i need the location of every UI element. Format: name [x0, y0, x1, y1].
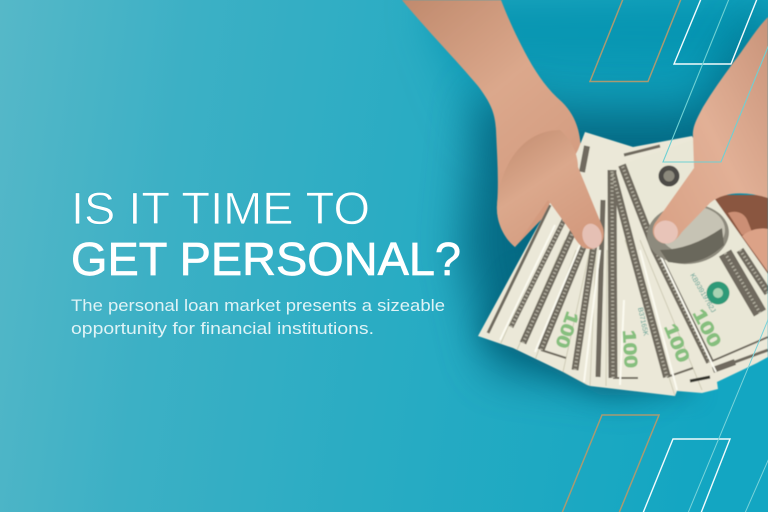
decorative teal lines: bottom [688, 315, 768, 512]
right hand fingers [712, 195, 768, 274]
portrait [646, 206, 730, 265]
title [71, 183, 461, 285]
title line 1: IS IT TIME TO [71, 183, 370, 234]
decorative parallelogram: white top [674, 0, 757, 64]
ornament texture [511, 165, 768, 378]
green numerals: 100 [619, 330, 641, 368]
treasury seal [658, 166, 680, 186]
subtitle line 2: opportunity for financial institutions. [71, 319, 374, 338]
subtitle line 1: The personal loan market presents a sizeable [71, 296, 445, 315]
green numerals [556, 308, 721, 368]
decorative parallelogram: white bottom [643, 439, 730, 512]
serial numbers: KB93919762J [688, 272, 716, 314]
subtitle [71, 296, 445, 338]
green seal [706, 282, 730, 304]
title line 2: GET PERSONAL? [71, 233, 461, 285]
serial numbers: B37165K [636, 307, 649, 337]
green numerals: 100 [660, 321, 694, 365]
photo: hands holding money [402, 0, 768, 400]
banknote fan [470, 125, 768, 400]
note edges [500, 230, 702, 396]
left forearm and hand back [402, 0, 581, 247]
left thumbnail [580, 221, 604, 251]
green numerals: 100 [689, 306, 725, 350]
decorative parallelogram: gold top [590, 0, 681, 82]
green numerals: 100 [552, 309, 582, 351]
left thumb [497, 130, 604, 249]
serial numbers [636, 272, 716, 337]
note faces [620, 140, 768, 358]
decorative parallelogram: gold bottom [562, 415, 659, 512]
decorative teal line: top [663, 0, 768, 162]
right hand and thumb [653, 17, 768, 244]
note ornament stripes [488, 146, 768, 381]
note edge highlights [500, 225, 716, 390]
right thumbnail [651, 217, 681, 247]
